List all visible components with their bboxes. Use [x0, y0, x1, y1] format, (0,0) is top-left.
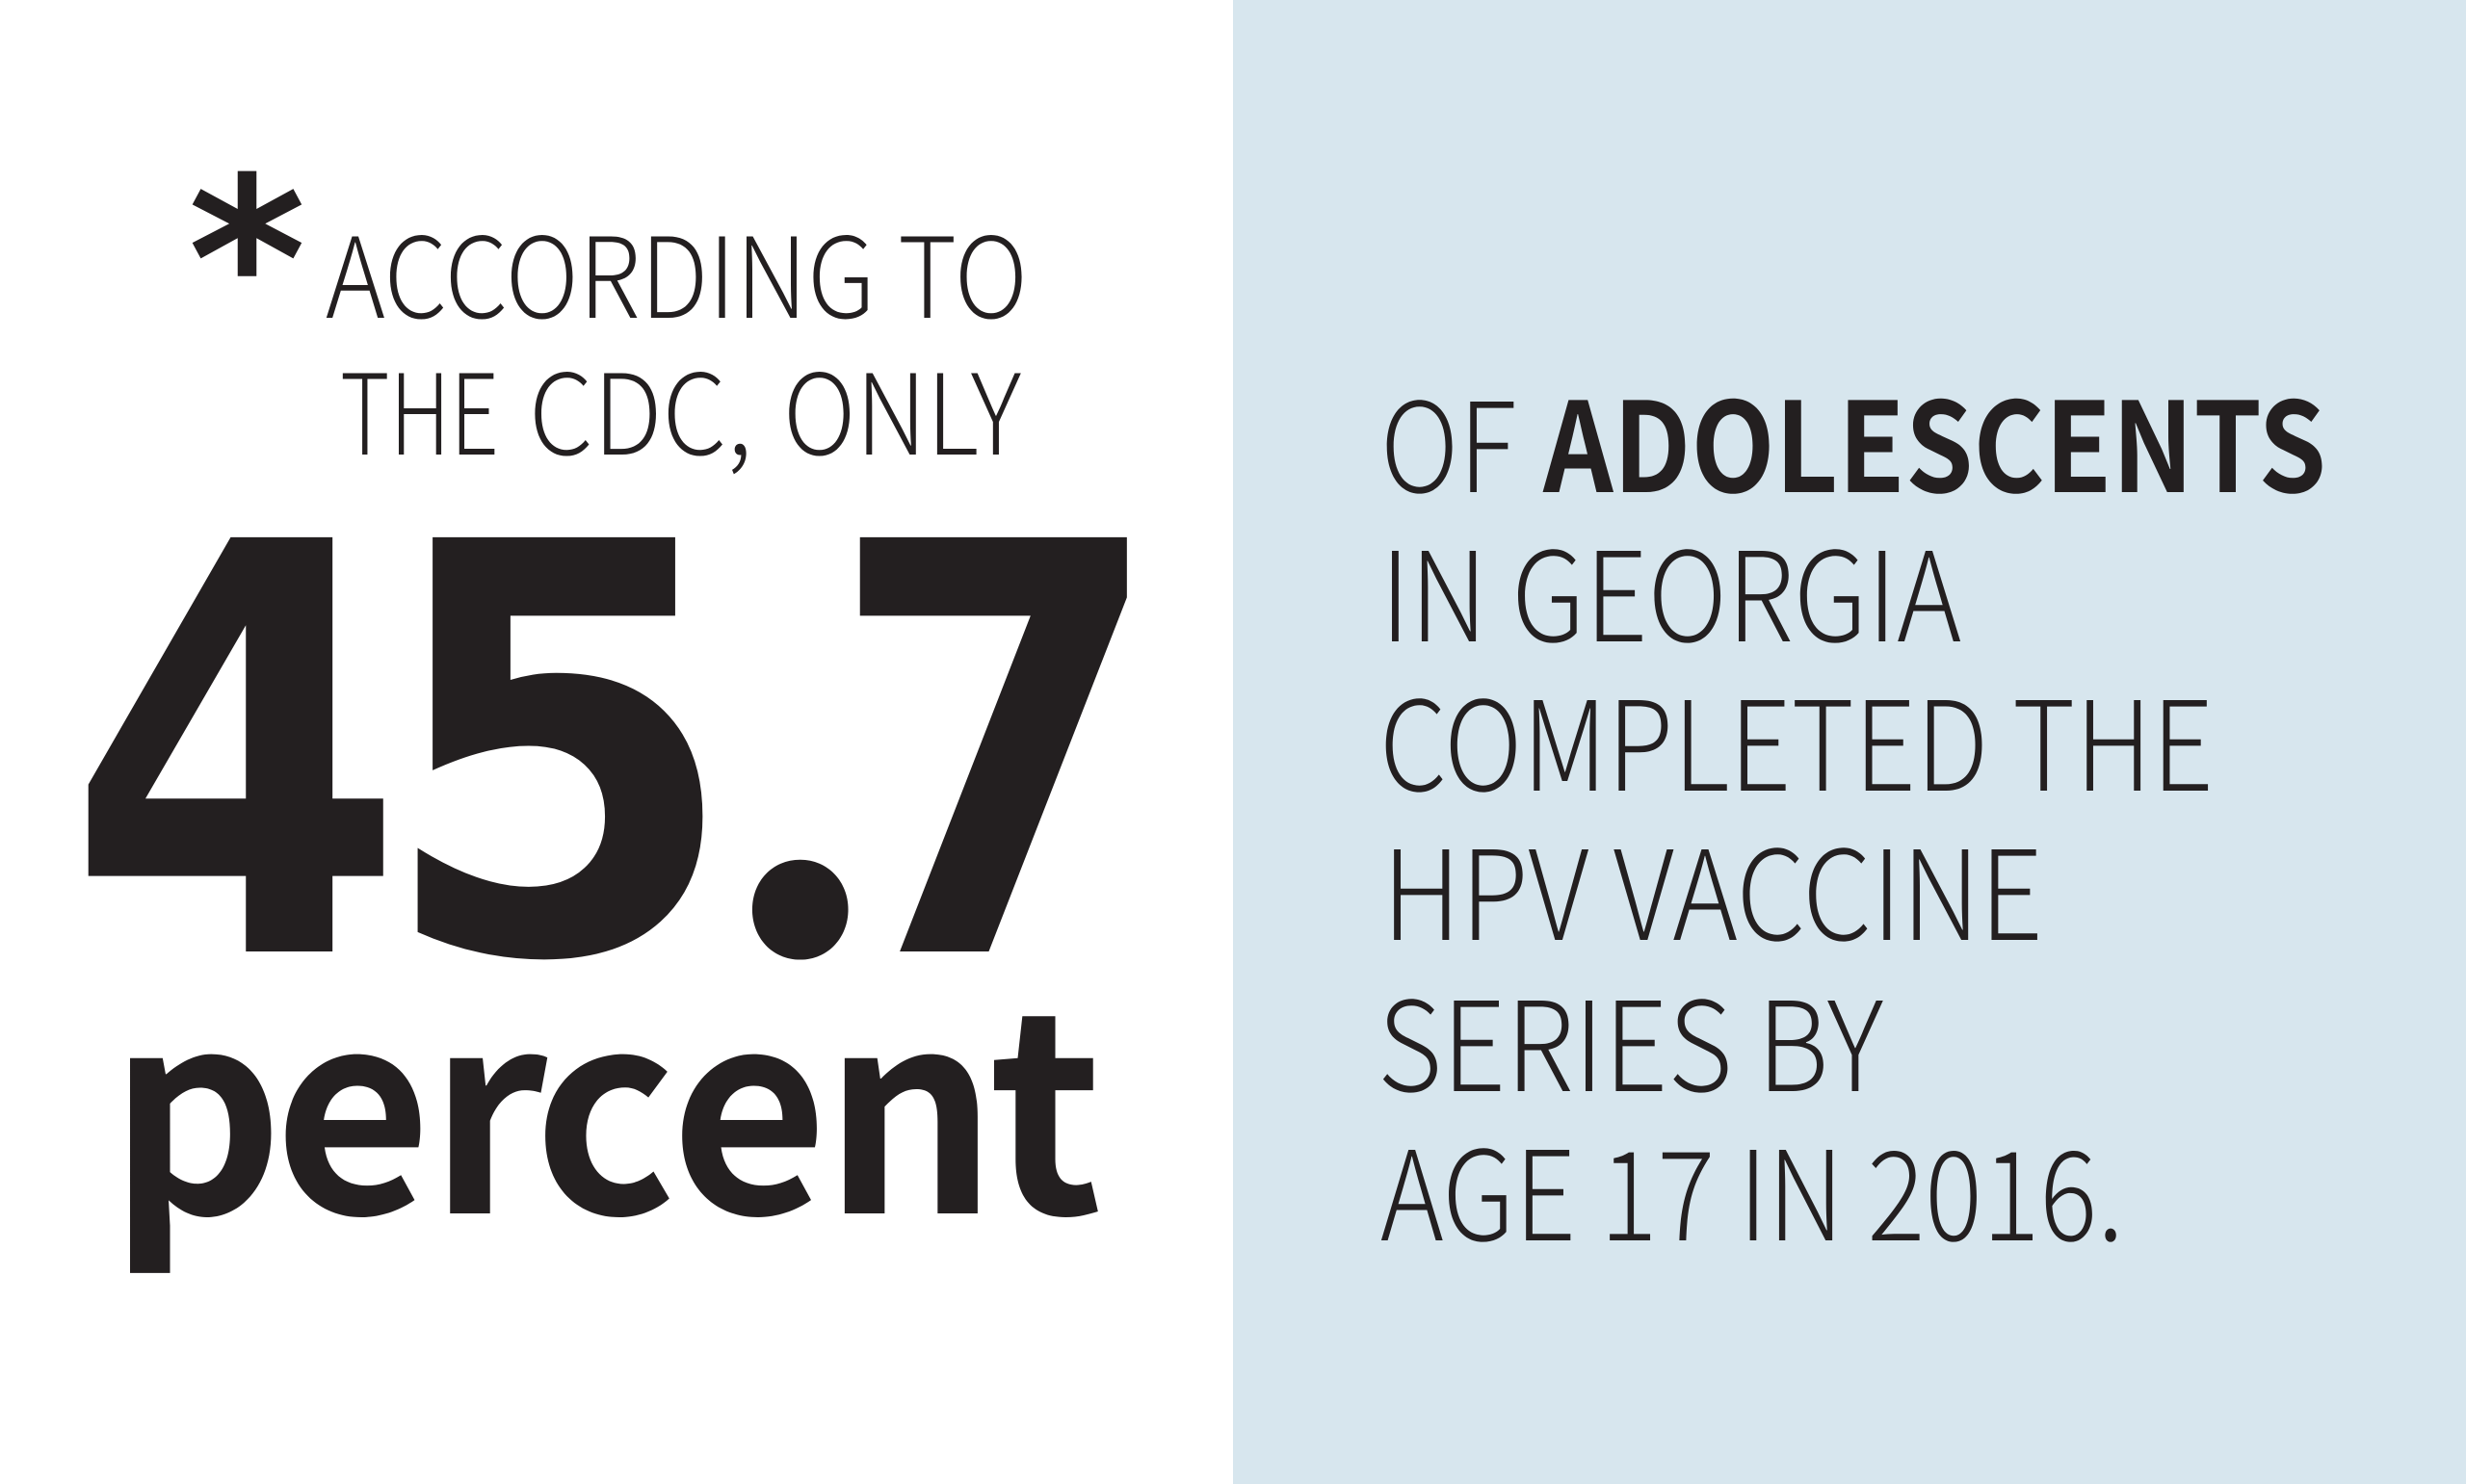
- description text: OF: [1380, 349, 1516, 529]
- intro text: ACCORDING TO: [326, 189, 1028, 351]
- description text: [1377, 349, 2326, 1277]
- big number: 7: [827, 425, 1166, 1086]
- description text: AGE 17 IN 2016.: [1380, 1097, 2124, 1277]
- description text: COMPLETED THE: [1379, 647, 2214, 827]
- intro text: [326, 189, 1028, 487]
- icon: asterisk: *: [188, 130, 306, 393]
- description text: IN GEORGIA: [1380, 498, 1961, 678]
- panel: left statistic: [0, 0, 1233, 1484]
- intro text: THE: [340, 325, 499, 487]
- panel: right description: [1233, 0, 2466, 1484]
- intro text: CDC,: [529, 325, 752, 487]
- big number: [66, 425, 1166, 1086]
- big number: 4: [66, 425, 406, 1086]
- description text: HPV VACCINE: [1382, 796, 2043, 976]
- description text: ADOLESCENTS: [1542, 349, 2326, 529]
- big number: .: [721, 430, 879, 1084]
- unit: percent: percent: [109, 893, 1103, 1294]
- intro text: ONLY: [783, 325, 1021, 487]
- big number: 5: [378, 425, 739, 1086]
- description text: SERIES BY: [1377, 948, 1883, 1128]
